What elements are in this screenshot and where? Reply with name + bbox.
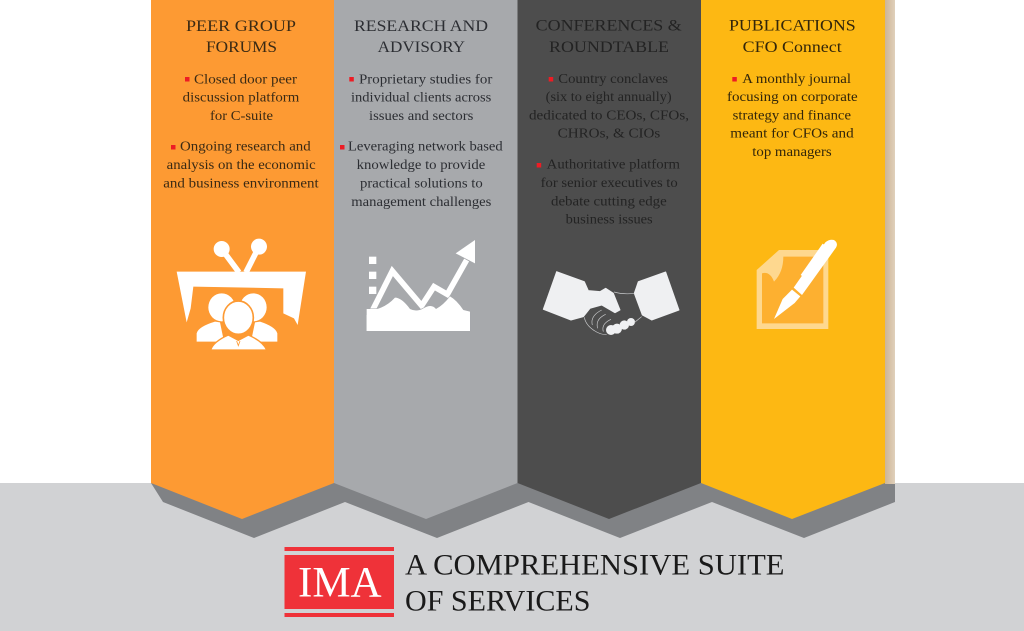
text block: leveraging network: Leveraging network based	[348, 140, 503, 155]
heading	[186, 18, 296, 56]
heading: RESEARCH AND	[354, 18, 488, 35]
heading	[536, 18, 682, 56]
panel: conferences and roundtable	[518, 0, 701, 519]
heading	[729, 18, 856, 56]
text block: monthly journal	[727, 72, 858, 160]
logo: IMA	[284, 547, 394, 617]
dark ribbon	[518, 0, 701, 519]
heading: CFO Connect	[743, 39, 842, 56]
text block: country conclaves	[529, 72, 689, 142]
panel: publications cfo connect	[701, 0, 885, 519]
text block: ongoing research: Ongoing research and	[180, 140, 311, 155]
text block: authoritative platform: debate cutting edge	[551, 194, 667, 209]
text block: closed door: for C-suite	[210, 109, 273, 124]
text block: proprietary studies: Proprietary studies for	[359, 72, 493, 88]
heading: ROUNDTABLE	[549, 39, 669, 56]
icon: tv with people	[177, 239, 306, 350]
text block: ongoing research	[163, 140, 319, 192]
panel: peer group forums	[151, 0, 334, 519]
text block: proprietary studies: individual clients across	[351, 91, 491, 106]
text block: country conclaves: (six to eight annually)	[546, 90, 672, 105]
text block: authoritative platform	[537, 158, 680, 228]
title	[405, 548, 784, 618]
text block: proprietary studies: issues and sectors	[369, 109, 473, 124]
ribbon edge strip	[885, 0, 895, 484]
icon: rising chart	[367, 240, 475, 331]
heading: PUBLICATIONS	[729, 18, 856, 35]
orange ribbon	[151, 0, 334, 519]
text block: monthly journal: top managers	[752, 145, 832, 160]
title: OF SERVICES	[405, 585, 590, 618]
panel: research and advisory	[334, 0, 518, 519]
text block: closed door	[183, 72, 299, 124]
icon: handshake	[543, 272, 679, 335]
text block: authoritative platform: Authoritative platform	[547, 158, 680, 173]
text block: leveraging network: practical solutions to	[360, 177, 483, 192]
icon: paper and pen	[757, 240, 837, 329]
text block: leveraging network: knowledge to provide	[357, 158, 485, 173]
title: A COMPREHENSIVE SUITE	[405, 548, 784, 582]
text block: leveraging network	[340, 140, 503, 210]
heading: PEER GROUP	[186, 18, 296, 35]
text block: proprietary studies	[349, 72, 493, 124]
text block: authoritative platform: business issues	[566, 213, 653, 228]
text block: country conclaves: Country conclaves	[558, 72, 668, 87]
text block: ongoing research: and business environment	[163, 177, 319, 192]
text block: monthly journal: meant for CFOs and	[730, 127, 854, 142]
text block: leveraging network: management challenges	[351, 195, 491, 210]
heading: CONFERENCES &	[536, 18, 682, 35]
text block: country conclaves: CHROs, & CIOs	[558, 127, 660, 142]
yellow ribbon	[701, 0, 885, 519]
text block: closed door: Closed door peer	[194, 72, 297, 88]
ground band	[0, 483, 1024, 631]
gray ribbon	[334, 0, 518, 519]
text block: closed door: discussion platform	[183, 91, 299, 106]
text block: monthly journal: A monthly journal	[742, 72, 851, 87]
text block: country conclaves: dedicated to CEOs, CFOs,	[529, 108, 689, 124]
text block: monthly journal: strategy and finance	[733, 108, 851, 124]
text block: authoritative platform: for senior executives to	[541, 176, 678, 191]
chevron shadow	[151, 483, 895, 538]
text block: monthly journal: focusing on corporate	[727, 90, 858, 105]
text block: ongoing research: analysis on the economic	[167, 158, 316, 173]
heading: ADVISORY	[378, 39, 465, 56]
heading: FORUMS	[206, 39, 277, 56]
heading	[354, 18, 488, 56]
logo: IMA: IMA	[298, 560, 382, 607]
